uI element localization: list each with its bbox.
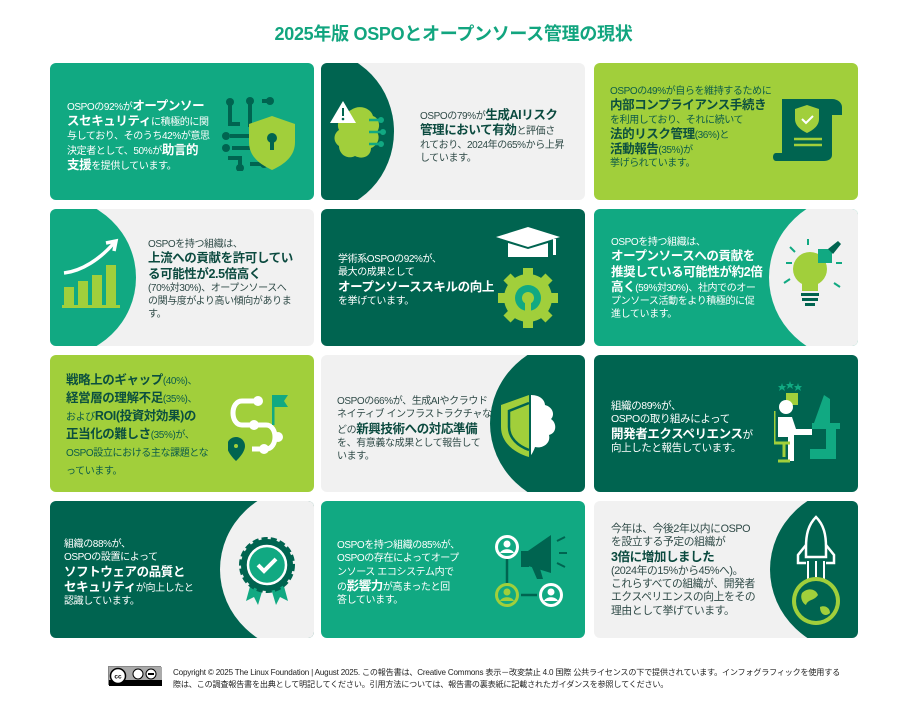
- icon: roadmap: [228, 395, 288, 461]
- text: contribution: 進しています。: [611, 309, 677, 320]
- text: upstream: (70%対30%)、オープンソースへ: [148, 283, 286, 294]
- text: challenges: OSPO設立における主な課題とな: [66, 448, 208, 459]
- text: OSPO growth: を設立する予定の組織が: [611, 536, 725, 548]
- text: quality security: 認識しています。: [64, 596, 140, 607]
- text: upstream: る可能性が2.5倍高く: [148, 267, 261, 281]
- text: influence: 答しています。: [337, 595, 403, 606]
- icon: scroll document: [773, 99, 842, 161]
- panel: developer experience: [594, 355, 858, 492]
- text: contribution: OSPOを持つ組織は、: [611, 237, 706, 248]
- text: contribution: 推奨している可能性が約2倍: [611, 265, 762, 279]
- text: upstream: の関与度がより高い傾向がありま: [148, 296, 291, 307]
- text: emerging tech: を、有意義な成果として報告して: [337, 438, 480, 449]
- text: quality security: ソフトウェアの品質と: [64, 565, 185, 579]
- panel: quality security: [50, 501, 314, 638]
- text: challenges: およびROI(投資対効果)の: [66, 409, 196, 423]
- text: emerging tech: [337, 395, 492, 462]
- text: academic: オープンソーススキルの向上: [338, 280, 494, 294]
- text: contribution: [611, 236, 762, 320]
- text: compliance: 活動報告(35%)が: [610, 142, 693, 156]
- text: quality security: OSPOの設置によって: [64, 552, 158, 563]
- text: emerging tech: どの新興技術への対応準備: [337, 422, 477, 436]
- icon: creative commons badge: cc: [114, 674, 122, 680]
- text: upstream: OSPOを持つ組織は、: [148, 239, 242, 250]
- icon: gear cap: [496, 227, 560, 328]
- text: compliance: 内部コンプライアンス手続き: [610, 98, 766, 112]
- text: academic: を挙げています。: [338, 296, 414, 307]
- text: emerging tech: OSPOの66%が、生成AIやクラウド: [337, 396, 488, 407]
- text: contribution: 高く(59%対30%)、社内でのオー: [611, 280, 756, 294]
- text: OSPO growth: [611, 522, 755, 617]
- text: upstream: [148, 238, 293, 320]
- icon: creative commons badge: [108, 666, 161, 685]
- text: contribution: プンソース活動をより積極的に促: [611, 296, 754, 307]
- text: influence: OSPOを持つ組織の85%が、: [337, 540, 460, 551]
- text: academic: [338, 253, 494, 307]
- icon: award badge: [239, 537, 295, 605]
- text: AI risk: [420, 108, 564, 164]
- text: challenges: 戦略上のギャップ(40%)、: [66, 373, 197, 387]
- text: quality security: セキュリティが向上したと: [64, 580, 193, 594]
- text: developer experience: OSPOの取り組みによって: [611, 413, 730, 425]
- text: developer experience: 開発者エクスペリエンスが: [611, 427, 753, 441]
- panel: academic: [321, 209, 585, 346]
- text: security: [67, 99, 210, 172]
- text: challenges: 正当化の難しさ(35%)が、: [66, 427, 194, 441]
- icon: growth chart: [62, 238, 120, 308]
- panel: security: [50, 63, 314, 200]
- text: emerging tech: ネイティブ インフラストラクチャな: [337, 409, 492, 420]
- text: academic: 学術系OSPOの92%が、: [338, 254, 442, 265]
- text: compliance: 法的リスク管理(36%)と: [610, 127, 729, 141]
- text: AI risk: しています。: [420, 153, 476, 164]
- text: developer experience: 組織の89%が、: [611, 400, 681, 412]
- text: quality security: [64, 538, 193, 607]
- text: developer experience: [611, 400, 753, 454]
- text: OSPO growth: これらすべての組織が、開発者: [611, 578, 755, 590]
- panel: AI risk: [321, 63, 585, 200]
- icon: megaphone people: [495, 535, 567, 607]
- text: upstream: 上流への貢献を許可してい: [148, 251, 293, 265]
- text: academic: 最大の成果として: [338, 267, 414, 278]
- text: challenges: 経営層の理解不足(35%)、: [66, 391, 197, 405]
- text: security: 決定者として、50%が助言的: [67, 143, 198, 157]
- footer text: 際は、この調査報告書を出典として明記してください。引用方法については、報告書の裏表紙に記載されたガイダンスを参照してください。: [173, 680, 668, 689]
- text: security: OSPOの92%がオープンソー: [67, 99, 204, 113]
- panel: upstream: [50, 209, 314, 346]
- text: influence: OSPOの存在によってオープ: [337, 553, 459, 564]
- text: OSPO growth: 理由として挙げています。: [611, 605, 734, 617]
- panel: emerging tech: [321, 355, 585, 492]
- icon: brain warning: [330, 101, 386, 158]
- text: contribution: オープンソースへの貢献を: [611, 249, 755, 263]
- title: 2025年版 OSPOとオープンソース管理の現状: [275, 24, 632, 44]
- text: security: 支援を提供しています。: [67, 158, 176, 172]
- text: influence: [337, 539, 460, 606]
- text: compliance: [610, 85, 771, 169]
- text: AI risk: れており、2024年の65%から上昇: [420, 140, 564, 151]
- text: OSPO growth: 3倍に増加しました: [611, 550, 714, 564]
- text: OSPO growth: 今年は、今後2年以内にOSPO: [611, 523, 750, 535]
- text: security: スセキュリティに積極的に関: [67, 114, 209, 128]
- icon: bulb puzzle: [784, 239, 842, 306]
- panel: contribution: [594, 209, 858, 346]
- icon: developer at desk: [774, 381, 840, 462]
- text: quality security: 組織の88%が、: [64, 539, 131, 550]
- text: compliance: OSPOの49%が自らを維持するために: [610, 86, 771, 97]
- text: challenges: っています。: [66, 466, 122, 477]
- text: developer experience: 向上したと報告しています。: [611, 442, 741, 454]
- text: compliance: 挙げられています。: [610, 158, 695, 169]
- text: compliance: を利用しており、それに続いて: [610, 115, 743, 126]
- text: OSPO growth: (2024年の15%から45%へ)。: [611, 565, 743, 577]
- text: emerging tech: います。: [337, 451, 374, 462]
- icon: shield brain: [501, 395, 556, 457]
- footer text: [173, 668, 840, 689]
- text: AI risk: OSPOの79%が生成AIリスク: [420, 108, 558, 122]
- text: AI risk: 管理において有効と評価さ: [420, 123, 555, 137]
- panel: compliance: [594, 63, 858, 200]
- icon: circuit shield: [222, 97, 295, 171]
- text: challenges: [66, 373, 208, 477]
- text: influence: ンソース エコシステム内で: [337, 567, 454, 578]
- text: OSPO growth: エクスペリエンスの向上をその: [611, 591, 755, 603]
- panel: challenges: [50, 355, 314, 492]
- text: upstream: す。: [148, 309, 166, 320]
- footer text: Copyright © 2025 The Linux Foundation | August 2025. この報告書は、Creative Commons 表示－改変禁止 4.0 国際 公共ライセンスの下で提供されています。インフォグラフィックを使用する: [173, 668, 840, 677]
- icon: rocket globe: [792, 515, 840, 625]
- text: influence: の影響力が高まったと回: [337, 579, 450, 593]
- text: security: 与しており、そのうち42%が意思: [67, 131, 210, 142]
- panel: OSPO growth: [594, 501, 858, 638]
- panel: influence: [321, 501, 585, 638]
